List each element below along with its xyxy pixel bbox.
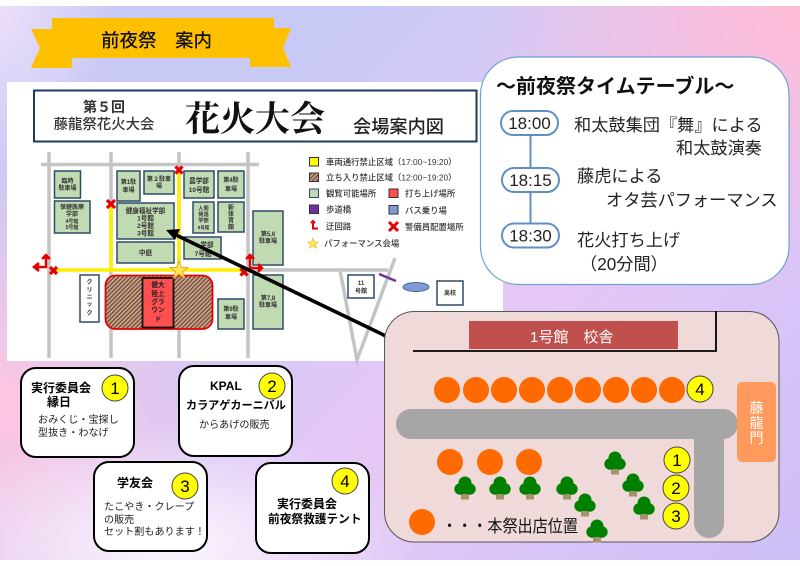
card 2: からあげの販売 bbox=[199, 418, 270, 431]
legend bbox=[308, 157, 464, 248]
clinic: ッ bbox=[86, 302, 93, 308]
legend: 観覧可能場所 bbox=[326, 188, 377, 198]
card 3: の販売 bbox=[104, 513, 134, 526]
high school: 高校 bbox=[444, 289, 456, 297]
card 1: おみくじ・宝探し bbox=[38, 413, 119, 426]
parking 2: 第２駐車 bbox=[147, 175, 171, 183]
building: agriculture: 農学部 bbox=[189, 176, 209, 185]
building: health welfare faculty: 2号館 bbox=[137, 222, 154, 230]
time table heading: ～前夜祭タイムテーブル～ bbox=[496, 74, 734, 98]
card 4: 前夜祭救護テント bbox=[268, 512, 362, 526]
building: human development: 発達 bbox=[198, 210, 209, 218]
gate bbox=[737, 382, 776, 462]
building: health and medical faculty: 5号館 bbox=[66, 224, 78, 231]
courtyard bbox=[117, 242, 174, 263]
parking 7,8 bbox=[253, 275, 283, 329]
building: human development bbox=[193, 202, 214, 233]
building: health and medical faculty: 4号館 bbox=[66, 218, 78, 225]
building 7: 学部 bbox=[200, 240, 214, 249]
school building bbox=[469, 321, 678, 349]
legend: 打ち上げ場所 bbox=[405, 188, 456, 198]
map title box: 第５回 bbox=[83, 99, 125, 115]
building: human development: 8号館 bbox=[198, 225, 210, 231]
timeline connectors bbox=[530, 135, 532, 223]
building: human development: 学部 bbox=[198, 216, 209, 224]
parking 5,6 bbox=[253, 211, 283, 265]
legend: 立ち入り禁止区域（12:00~19:20） bbox=[326, 172, 457, 182]
card 2: KPAL bbox=[210, 379, 242, 393]
card 4 bbox=[256, 463, 369, 553]
card 4: 実行委員会 bbox=[277, 496, 337, 511]
gate: 門 bbox=[750, 430, 764, 446]
parking: temporary: 臨時 bbox=[61, 177, 74, 185]
event 3 bbox=[577, 230, 680, 274]
stall legend: ・・・本祭出店位置 bbox=[442, 517, 578, 536]
marker 2 bbox=[663, 475, 689, 501]
marker 1 bbox=[664, 447, 690, 473]
building 7: 7号館 bbox=[195, 250, 212, 258]
panel: venue map bbox=[7, 82, 503, 361]
building 11: 11 bbox=[358, 281, 365, 287]
marker 3: 3 bbox=[671, 507, 681, 526]
detour arrow right bbox=[246, 255, 262, 272]
building 11 bbox=[348, 275, 374, 298]
event 1 bbox=[574, 115, 763, 158]
building 11: 号館 bbox=[355, 288, 367, 295]
card 1: 型抜き・わなげ bbox=[38, 426, 109, 439]
time 18:00: 18:00 bbox=[508, 114, 551, 133]
title banner bbox=[31, 18, 291, 68]
event 2: 藤虎による bbox=[577, 166, 662, 186]
parking 1 bbox=[117, 171, 140, 201]
school building: 1号館 校舎 bbox=[530, 329, 613, 346]
card 3 bbox=[94, 462, 207, 551]
no-vehicle route bbox=[53, 170, 245, 270]
building: agriculture bbox=[184, 171, 214, 198]
legend: 迂回路 bbox=[326, 222, 352, 232]
launch site: athletic ground: 陸上 bbox=[151, 289, 165, 298]
performance star bbox=[170, 261, 188, 278]
new gymnasium: 体 bbox=[228, 210, 234, 218]
new gymnasium bbox=[218, 202, 244, 232]
time 18:15: 18:15 bbox=[509, 171, 552, 190]
parking 1: 車場 bbox=[122, 186, 135, 194]
parking 9: 第9駐 bbox=[223, 305, 239, 313]
badge 3: 3 bbox=[180, 477, 190, 496]
parking 2: 場 bbox=[156, 182, 162, 190]
card 3: セット割もあります！ bbox=[104, 526, 205, 538]
badge 2: 2 bbox=[267, 377, 277, 396]
road bbox=[411, 424, 723, 523]
detour arrow left bbox=[34, 255, 50, 271]
card 2: カラアゲカーニバル bbox=[186, 398, 286, 412]
high school bbox=[437, 281, 463, 305]
card 1 bbox=[21, 368, 134, 457]
clinic: ク bbox=[86, 278, 93, 286]
event 1: 和太鼓演奏 bbox=[676, 138, 762, 158]
parking 7,8: 駐車場 bbox=[259, 301, 277, 309]
event 3: （20分間） bbox=[580, 254, 668, 274]
card 3: 学友会 bbox=[117, 475, 153, 490]
parking 9: 車場 bbox=[225, 313, 237, 321]
gate: 龍 bbox=[750, 415, 764, 431]
time 18:30: 18:30 bbox=[509, 226, 552, 246]
parking: temporary: 駐車場 bbox=[58, 184, 77, 192]
lower stalls bbox=[437, 449, 542, 475]
parking 4 bbox=[218, 171, 244, 198]
clinic: ニ bbox=[86, 294, 93, 301]
map title box: 花火大会 bbox=[185, 100, 325, 139]
title banner: 前夜祭 案内 bbox=[101, 30, 212, 51]
building: health and medical faculty: 保健医療 bbox=[60, 203, 84, 211]
marker 4: 4 bbox=[695, 380, 705, 399]
stall row bbox=[434, 377, 685, 403]
launch site: athletic ground: 健大 bbox=[151, 280, 165, 289]
new gymnasium: 館 bbox=[228, 224, 234, 231]
arrow from map to stall area bbox=[166, 229, 392, 339]
panel: time table bbox=[480, 57, 789, 284]
event 2: オタ芸パフォーマンス bbox=[606, 190, 778, 210]
clinic: ク bbox=[86, 309, 93, 317]
clinic: リ bbox=[86, 288, 93, 294]
card 3: たこやき・クレープ bbox=[104, 501, 194, 513]
parking 4: 第4駐 bbox=[223, 176, 239, 184]
legend: パフォーマンス会場 bbox=[324, 238, 400, 248]
marker 2: 2 bbox=[671, 479, 681, 498]
new gymnasium: 育 bbox=[228, 216, 234, 224]
building: human development: 人間 bbox=[198, 205, 209, 212]
parking 7,8: 第7,8 bbox=[261, 294, 276, 302]
new gymnasium: 新 bbox=[228, 204, 234, 212]
parking: temporary bbox=[54, 171, 80, 198]
building: health and medical faculty: 学部 bbox=[66, 210, 78, 218]
trees bbox=[454, 452, 655, 542]
event 3: 花火打ち上げ bbox=[577, 230, 680, 250]
launch site: athletic ground: ド bbox=[155, 316, 161, 323]
legend: 警備員配置場所 bbox=[405, 222, 464, 232]
card 1: 実行委員会 bbox=[31, 380, 91, 395]
card 1: 縁日 bbox=[47, 394, 71, 409]
clinic bbox=[80, 275, 99, 322]
time 18:30 bbox=[502, 224, 559, 248]
marker 4 bbox=[687, 376, 713, 402]
restricted zone bbox=[106, 276, 212, 329]
building 7 bbox=[184, 237, 221, 259]
courtyard: 中庭 bbox=[139, 248, 152, 257]
time 18:15 bbox=[502, 168, 559, 192]
time 18:00 bbox=[501, 111, 558, 135]
launch site: athletic ground bbox=[142, 278, 174, 328]
building: health welfare faculty bbox=[117, 203, 174, 239]
roads bbox=[41, 152, 395, 360]
map title box bbox=[34, 90, 476, 142]
event 1: 和太鼓集団『舞』による bbox=[574, 115, 763, 135]
building: health welfare faculty: 健康福祉学部 bbox=[126, 206, 166, 215]
building: health and medical faculty bbox=[54, 201, 90, 233]
guard markers bbox=[50, 166, 248, 276]
legend: 車両通行禁止区域（17:00~19:20） bbox=[326, 157, 457, 167]
legend: バス乗り場 bbox=[405, 206, 447, 216]
legend: 歩道橋 bbox=[326, 204, 352, 214]
launch site: athletic ground: グラ bbox=[151, 297, 165, 306]
bus stop bbox=[403, 282, 429, 292]
parking 9 bbox=[218, 299, 244, 329]
badge 1: 1 bbox=[110, 379, 120, 398]
map title box: 藤龍祭花火大会 bbox=[54, 116, 155, 133]
marker 1: 1 bbox=[672, 451, 682, 470]
building: agriculture: 10号館 bbox=[189, 186, 210, 194]
marker 3 bbox=[663, 503, 689, 529]
panel: stall area map bbox=[384, 311, 779, 542]
gate: 藤 bbox=[750, 400, 764, 416]
event 2 bbox=[577, 166, 778, 210]
parking 5,6: 第5,6 bbox=[261, 230, 276, 238]
parking 1: 第1駐 bbox=[121, 178, 136, 186]
map title box: 会場案内図 bbox=[353, 117, 444, 137]
card 2 bbox=[179, 366, 292, 456]
parking 5,6: 駐車場 bbox=[259, 237, 277, 245]
launch site: athletic ground: ウン bbox=[151, 305, 165, 314]
badge 4: 4 bbox=[340, 472, 350, 491]
building: health welfare faculty: 1号館 bbox=[137, 214, 154, 222]
stall legend bbox=[409, 509, 578, 536]
parking 2 bbox=[144, 171, 174, 194]
pedestrian bridge bbox=[379, 274, 396, 281]
parking 4: 車場 bbox=[225, 185, 237, 193]
building: health welfare faculty: 3号館 bbox=[137, 230, 154, 238]
